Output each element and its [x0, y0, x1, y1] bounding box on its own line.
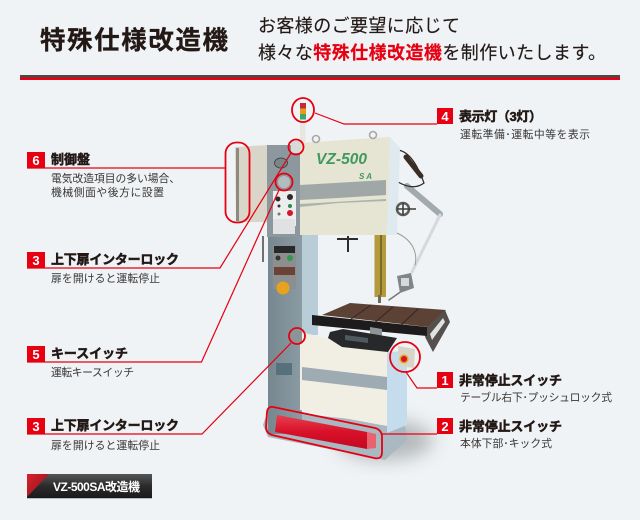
intro text: お客様のご要望に応じて — [258, 16, 460, 36]
callout 3: upper door interlock — [27, 252, 179, 285]
callout 1: emergency stop — [437, 372, 612, 404]
leader: 3 lower — [27, 328, 305, 434]
head cream body — [300, 137, 390, 235]
base plinth — [263, 410, 407, 460]
table stand — [370, 327, 382, 344]
kick panel — [275, 415, 376, 449]
base grey band — [302, 367, 387, 390]
yellow knob — [276, 282, 290, 294]
emergency stop box — [398, 346, 415, 368]
callout 2: kick stop: 非常停止スイッチ — [459, 419, 562, 434]
machine illustration: SA — [359, 172, 372, 181]
leader: 1 — [390, 342, 437, 388]
callout 6: control panel: 電気改造項目の多い場合、 — [51, 171, 180, 185]
work lamp arm — [389, 150, 440, 300]
door interlock switch lower — [291, 331, 302, 343]
callout 6: control panel — [27, 152, 180, 199]
callout 5: key switch: キースイッチ — [51, 346, 128, 361]
head side panel — [387, 137, 400, 235]
handwheel — [397, 203, 416, 215]
intro text — [258, 16, 606, 63]
saw guide post — [374, 235, 386, 297]
callout 6: control panel: 機械側面や後方に設置 — [51, 185, 164, 199]
callout 4: signal lamp: 4 — [441, 109, 449, 124]
callout 1: emergency stop: 非常停止スイッチ — [459, 373, 562, 388]
blade — [378, 295, 381, 303]
control panel — [273, 191, 296, 226]
callout 3: upper door interlock: 3 — [32, 253, 40, 268]
lifting eyes — [312, 136, 320, 142]
column nameplate — [276, 363, 292, 375]
leader: 2 — [266, 407, 437, 458]
leader: 4 — [292, 98, 437, 124]
callout 4: signal lamp: 表示灯（3灯） — [459, 109, 542, 124]
head grey band — [300, 180, 386, 200]
base front — [300, 332, 387, 426]
side panel — [235, 145, 267, 222]
key switch plate — [278, 176, 290, 188]
title: 特殊仕様改造機 — [40, 27, 228, 55]
callout 2: kick stop — [437, 418, 562, 450]
model badge: VZ-500SA改造機 — [53, 479, 140, 494]
callout 5: key switch — [27, 346, 134, 379]
header rule — [20, 75, 620, 80]
callout 3: upper door interlock: 扉を開けると運転停止 — [51, 272, 160, 285]
head handle — [337, 236, 358, 252]
callout 3: lower door interlock: 扉を開けると運転停止 — [51, 439, 160, 452]
model badge — [27, 474, 152, 499]
caution label — [273, 219, 295, 234]
callout 2: kick stop: 本体下部･キック式 — [460, 436, 552, 450]
signal tower pole — [300, 121, 306, 142]
callout 4: signal lamp: 運転準備･運転中等を表示 — [460, 127, 590, 141]
leader: 6 — [27, 142, 250, 222]
column side face — [302, 235, 318, 335]
table top — [322, 303, 446, 327]
door interlock switch upper — [291, 141, 301, 153]
signal tower lamp — [300, 103, 306, 120]
lamp head — [397, 273, 414, 293]
intro text: 様々な特殊仕様改造機を制作いたします。 — [258, 43, 606, 63]
table front rail — [312, 315, 427, 336]
callout 6: control panel: 制御盤 — [51, 152, 90, 167]
callout 3: upper door interlock: 上下扉インターロック — [51, 252, 179, 267]
machine illustration — [235, 103, 450, 460]
floor shadow — [337, 420, 433, 460]
callout 1: emergency stop: 1 — [441, 373, 449, 388]
callout 3: lower door interlock — [27, 418, 179, 452]
base side — [387, 351, 407, 433]
callout 1: emergency stop: テーブル右下･プッシュロック式 — [460, 390, 612, 404]
lower carriage — [328, 329, 397, 352]
leader: 3 upper — [27, 140, 304, 268]
grey column head — [267, 145, 300, 237]
callout 5: key switch: 5 — [32, 347, 40, 362]
callout 4: signal lamp — [437, 108, 590, 141]
callout 2: kick stop: 2 — [441, 419, 449, 434]
callout 3: lower door interlock: 3 — [32, 419, 40, 434]
callout 3: lower door interlock: 上下扉インターロック — [51, 418, 179, 433]
callout 6: control panel: 6 — [32, 153, 40, 168]
side lever — [262, 236, 264, 262]
lower control panel — [273, 245, 296, 289]
model logo: VZ-500 — [316, 151, 367, 168]
leader: 5 — [27, 174, 292, 362]
table right edge — [425, 310, 450, 352]
column front — [268, 232, 302, 434]
head emblem — [274, 158, 288, 168]
callout 5: key switch: 運転キースイッチ — [51, 366, 134, 379]
